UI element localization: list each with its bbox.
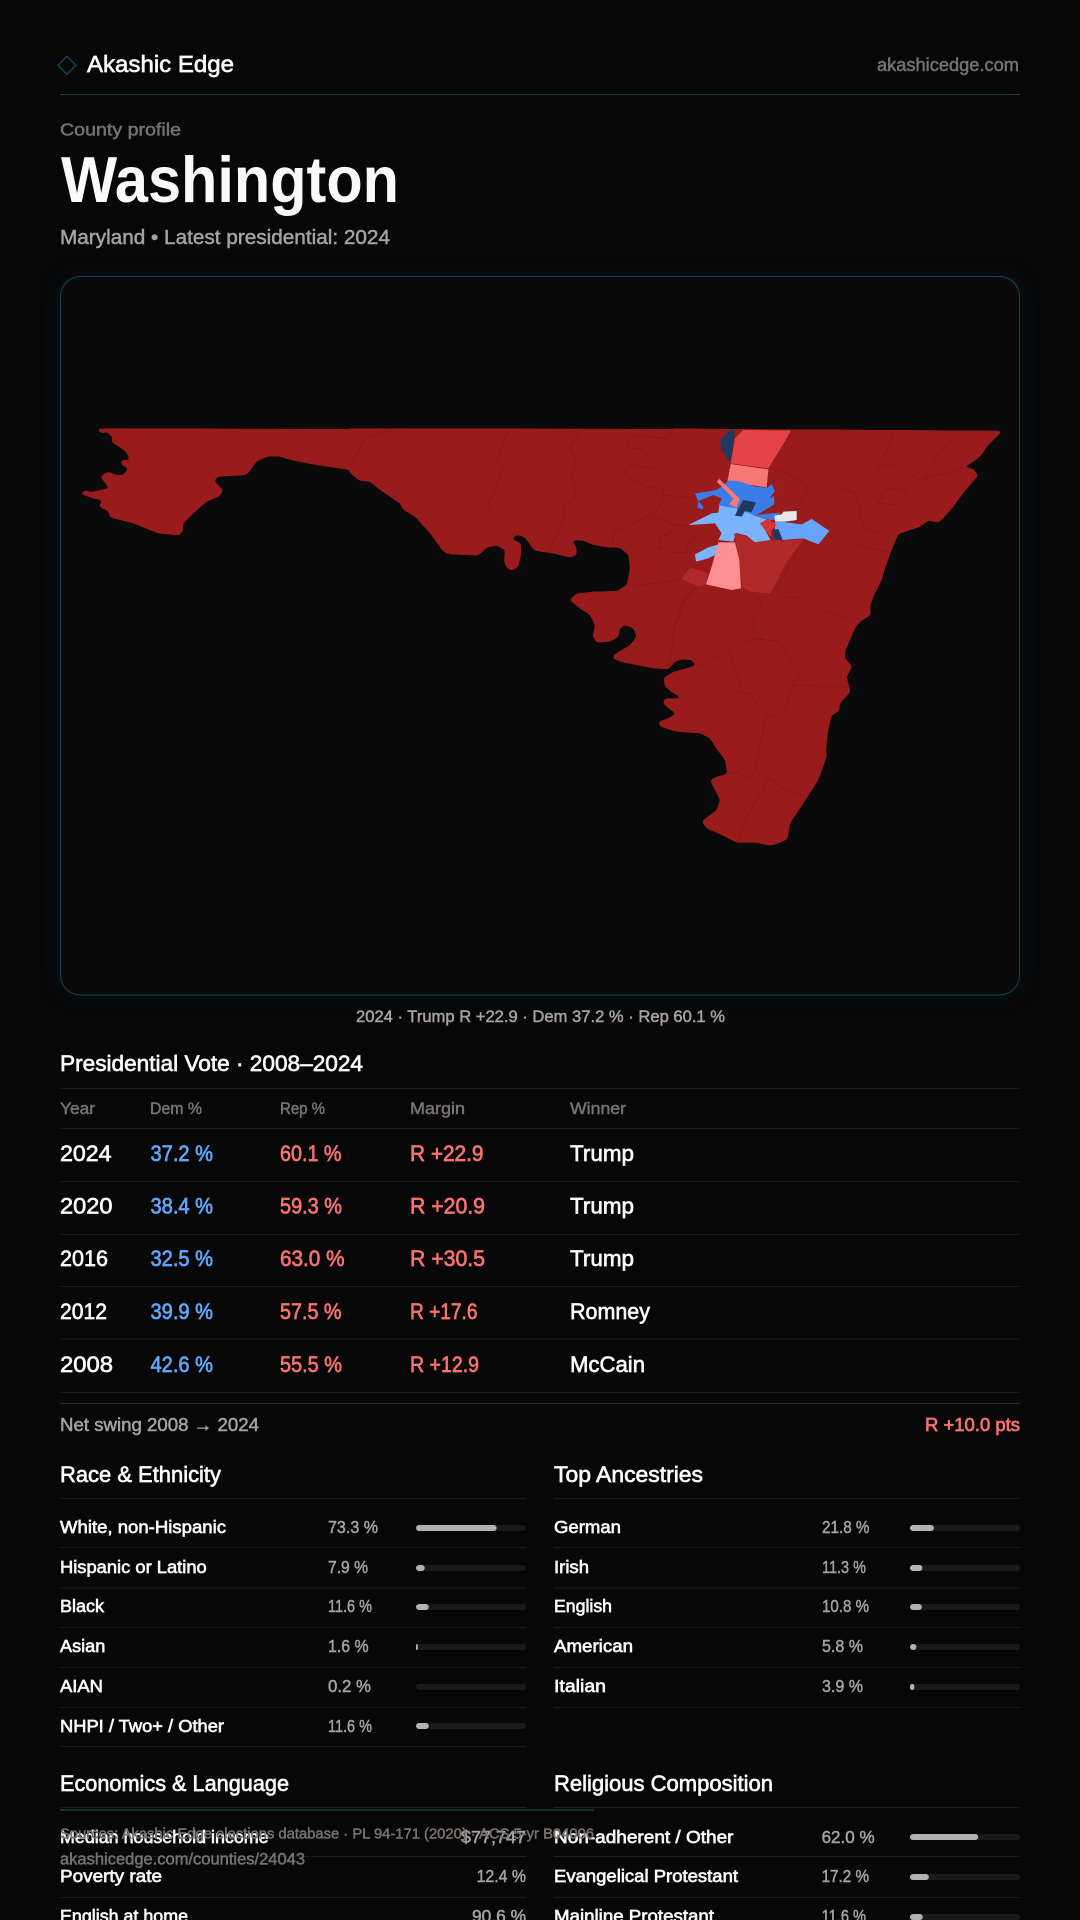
county name: Washington [61,143,399,216]
row 2016: 32.5 % [150,1246,213,1271]
panel: religious composition [554,1771,1020,1920]
sources line: Sources: Akashic Edge elections database · PL 94-171 (2020) · ACS 5-yr B04006 [60,1826,594,1842]
map: northern metro counties [720,429,791,487]
row american [554,1636,1020,1656]
row 2020: 59.3 % [280,1194,342,1218]
row 2008 [60,1352,645,1377]
header bar [58,51,1020,94]
row english: English [554,1596,612,1616]
map: central metro counties [681,479,829,593]
row aian [60,1676,526,1696]
row german [554,1517,1020,1537]
row black: Black [60,1596,104,1616]
heading: Top Ancestries [554,1462,703,1487]
row american: American [554,1636,633,1656]
row 2024 [60,1141,634,1166]
net swing row [60,1404,1020,1435]
row non-adherent: Non-adherent / Other [554,1827,734,1847]
subtitle: Maryland • Latest presidential: 2024 [60,227,390,249]
row irish: Irish [554,1557,589,1577]
brand name: Akashic Edge [87,51,234,77]
row 2024: 60.1 % [280,1141,342,1166]
table heading: Presidential Vote · 2008–2024 [60,1051,363,1076]
row italian: 3.9 % [822,1676,863,1696]
row 2020: 38.4 % [150,1194,213,1218]
row 2016 [60,1246,634,1271]
row 2012: Romney [570,1299,650,1324]
row 2016: R +30.5 [410,1246,485,1271]
eyebrow: County profile [60,120,181,140]
net swing value: R +10.0 pts [925,1415,1020,1435]
panel: county map [60,276,1020,995]
row english: 10.8 % [822,1596,869,1616]
row irish: 11.3 % [822,1557,866,1577]
row black: 11.6 % [328,1596,372,1616]
site url: akashicedge.com [877,55,1019,75]
heading: Religious Composition [554,1771,773,1796]
row income: Median household income [60,1827,269,1847]
row 2012: 57.5 % [280,1299,342,1324]
row 2016: 63.0 % [280,1246,344,1271]
map: county borders [350,429,963,842]
row 2012: R +17.6 [410,1299,478,1324]
row hispanic: 7.9 % [328,1557,368,1577]
footer url: akashicedge.com/counties/24043 [60,1850,305,1868]
panel: economics and language [60,1771,526,1920]
row 2012 [60,1299,650,1324]
row 2012: 2012 [60,1299,107,1324]
row hispanic: Hispanic or Latino [60,1557,207,1577]
row irish [554,1557,1020,1577]
icon: diamond logo [58,56,76,74]
row income [60,1827,526,1847]
row 2008: 2008 [60,1352,113,1377]
heading: Economics & Language [60,1771,289,1796]
net swing label: Net swing 2008 → 2024 [60,1415,259,1435]
row german: 21.8 % [822,1517,870,1537]
row 2008: 42.6 % [150,1352,213,1377]
heading: Race & Ethnicity [60,1462,221,1487]
row mainline [554,1906,1020,1920]
row asian: Asian [60,1636,105,1656]
row hispanic [60,1557,526,1577]
row non-adherent [554,1827,1020,1847]
row evangelical [554,1866,1020,1886]
table header row: Rep % [280,1100,325,1118]
row 2020: R +20.9 [410,1194,485,1218]
row poverty: Poverty rate [60,1866,162,1886]
row income: $77,747 [461,1827,526,1847]
row evangelical: 17.2 % [822,1866,869,1886]
map: base county fill [79,428,1003,846]
row black [60,1596,526,1616]
row non-adherent: 62.0 % [822,1827,875,1847]
row german: German [554,1517,621,1537]
row 2008: McCain [570,1352,645,1377]
row 2020: 2020 [60,1194,112,1218]
row poverty: 12.4 % [477,1866,526,1886]
row 2024: R +22.9 [410,1141,484,1166]
row white [60,1517,526,1537]
map caption: 2024 · Trump R +22.9 · Dem 37.2 % · Rep 60.1 % [356,1007,725,1026]
row american: 5.8 % [822,1636,863,1656]
row english [554,1596,1020,1616]
table header row [60,1100,627,1118]
table header row: Year [60,1100,96,1118]
row 2024: 37.2 % [150,1141,213,1166]
row 2024: Trump [570,1141,634,1166]
row 2008: R +12.9 [410,1352,479,1377]
row italian [554,1676,1020,1696]
row white: 73.3 % [328,1517,378,1537]
row nhpi: NHPI / Two+ / Other [60,1716,224,1736]
row white: White, non-Hispanic [60,1517,226,1537]
row evangelical: Evangelical Protestant [554,1866,738,1886]
row 2016: 2016 [60,1246,108,1271]
row asian: 1.6 % [328,1636,369,1656]
row english at home [60,1906,526,1920]
row nhpi: 11.6 % [328,1716,372,1736]
row 2012: 39.9 % [150,1299,213,1324]
title block [60,120,399,249]
row 2020 [60,1194,634,1218]
panel: top ancestries [554,1462,1020,1708]
row asian [60,1636,526,1656]
table header row: Winner [570,1100,627,1118]
row 2020: Trump [570,1194,634,1218]
row 2008: 55.5 % [280,1352,342,1377]
row nhpi [60,1716,526,1736]
table header row: Margin [410,1100,465,1118]
row poverty [60,1866,526,1886]
row aian: AIAN [60,1676,103,1696]
row aian: 0.2 % [328,1676,371,1696]
table header row: Dem % [150,1100,202,1118]
row 2024: 2024 [60,1141,112,1166]
panel: race and ethnicity [60,1462,526,1746]
footer overlay [60,1810,594,1868]
panel: presidential vote table [60,1051,1020,1392]
row italian: Italian [554,1676,606,1696]
row 2016: Trump [570,1246,634,1271]
